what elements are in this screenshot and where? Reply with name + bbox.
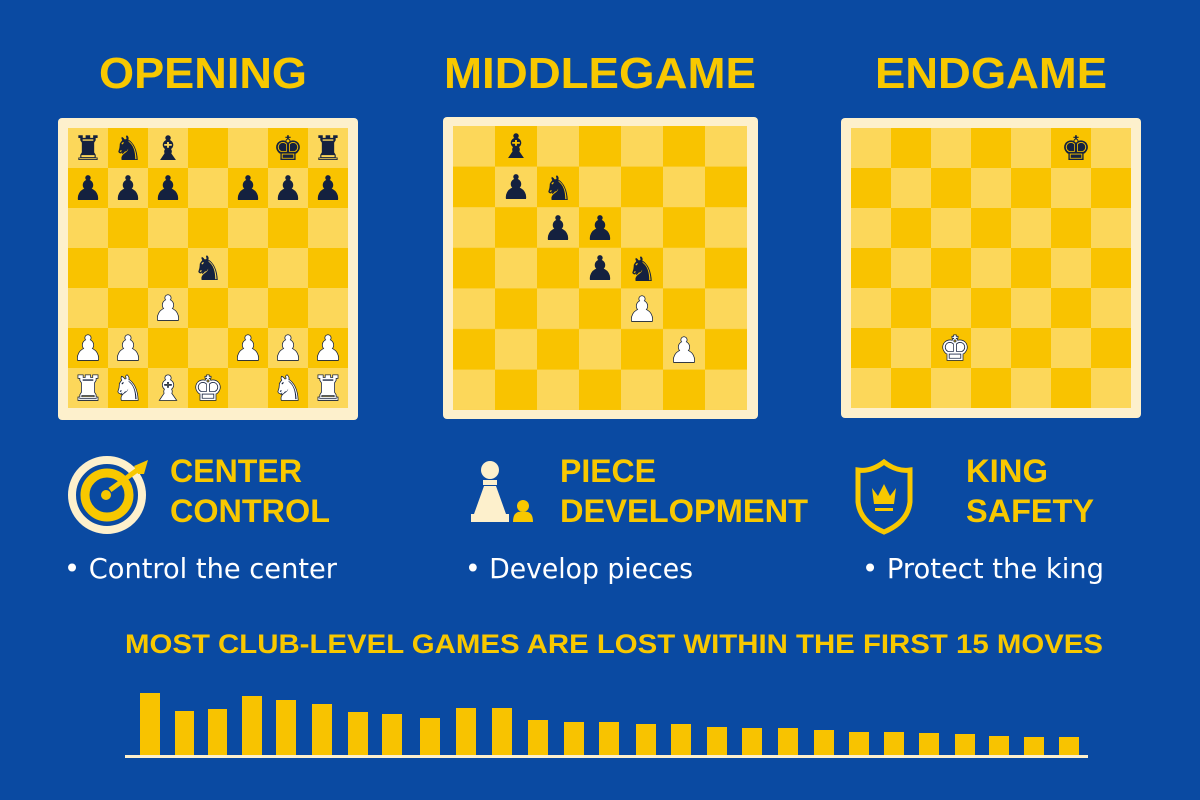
- board: opening: ♟: [73, 169, 103, 209]
- board: opening: ♜: [313, 129, 343, 169]
- heading: center control: CONTROL: [170, 493, 330, 529]
- board: opening: ♟: [273, 169, 303, 209]
- title: middlegame: MIDDLEGAME: [444, 49, 756, 98]
- board: opening: ♟: [153, 289, 183, 329]
- bullet: develop pieces: • Develop pieces: [465, 552, 693, 585]
- board: opening: ♝: [153, 369, 183, 409]
- board: endgame: ♚: [940, 329, 970, 369]
- icon: shield with crown: [858, 462, 910, 532]
- icon: pawn development: [471, 461, 533, 522]
- board: opening: ♞: [113, 129, 143, 169]
- board: opening: ♟: [113, 169, 143, 209]
- board: opening: ♝: [153, 129, 183, 169]
- title: opening: OPENING: [99, 49, 307, 98]
- board: middlegame: ♟: [501, 168, 531, 208]
- bullet: protect the king: • Protect the king: [862, 552, 1104, 585]
- board: opening: ♜: [313, 369, 343, 409]
- board: opening: ♟: [73, 329, 103, 369]
- icon: target: [72, 460, 148, 530]
- board: opening: ♟: [313, 169, 343, 209]
- board: middlegame: ♝: [501, 127, 531, 167]
- board: opening: ♜: [73, 369, 103, 409]
- board: opening: ♟: [153, 169, 183, 209]
- heading: king safety: KING: [966, 453, 1048, 489]
- board: opening: ♜: [73, 129, 103, 169]
- board: opening: ♚: [193, 369, 223, 409]
- board: opening: ♞: [273, 369, 303, 409]
- board: middlegame: [443, 117, 758, 419]
- board: middlegame: ♞: [627, 250, 657, 290]
- heading: center control: [170, 453, 330, 529]
- board: opening: ♟: [113, 329, 143, 369]
- board: opening: ♚: [273, 129, 303, 169]
- board: endgame: [841, 118, 1141, 418]
- heading: piece development: PIECE: [560, 453, 656, 489]
- board: opening: ♟: [273, 329, 303, 369]
- heading: piece development: DEVELOPMENT: [560, 493, 808, 529]
- board: opening: ♟: [233, 329, 263, 369]
- board: opening: ♟: [313, 329, 343, 369]
- banner statement: MOST CLUB-LEVEL GAMES ARE LOST WITHIN THE FIRST 15 MOVES: [125, 629, 1103, 659]
- heading: piece development: [560, 453, 808, 529]
- board: opening: ♟: [233, 169, 263, 209]
- heading: king safety: SAFETY: [966, 493, 1094, 529]
- board: middlegame: ♟: [543, 209, 573, 249]
- title: endgame: ENDGAME: [875, 49, 1107, 98]
- board: middlegame: ♞: [543, 169, 573, 209]
- bullet: control the center: • Control the center: [64, 552, 337, 585]
- heading: center control: CENTER: [170, 453, 302, 489]
- board: opening: ♞: [193, 249, 223, 289]
- board: opening: ♞: [113, 369, 143, 409]
- board: middlegame: ♟: [585, 209, 615, 249]
- board: opening: [58, 118, 358, 420]
- board: middlegame: ♟: [669, 331, 699, 371]
- board: endgame: ♚: [1061, 129, 1091, 169]
- bar chart: [125, 693, 1088, 758]
- board: middlegame: ♟: [627, 290, 657, 330]
- board: middlegame: ♟: [585, 249, 615, 289]
- heading: king safety: [966, 453, 1094, 529]
